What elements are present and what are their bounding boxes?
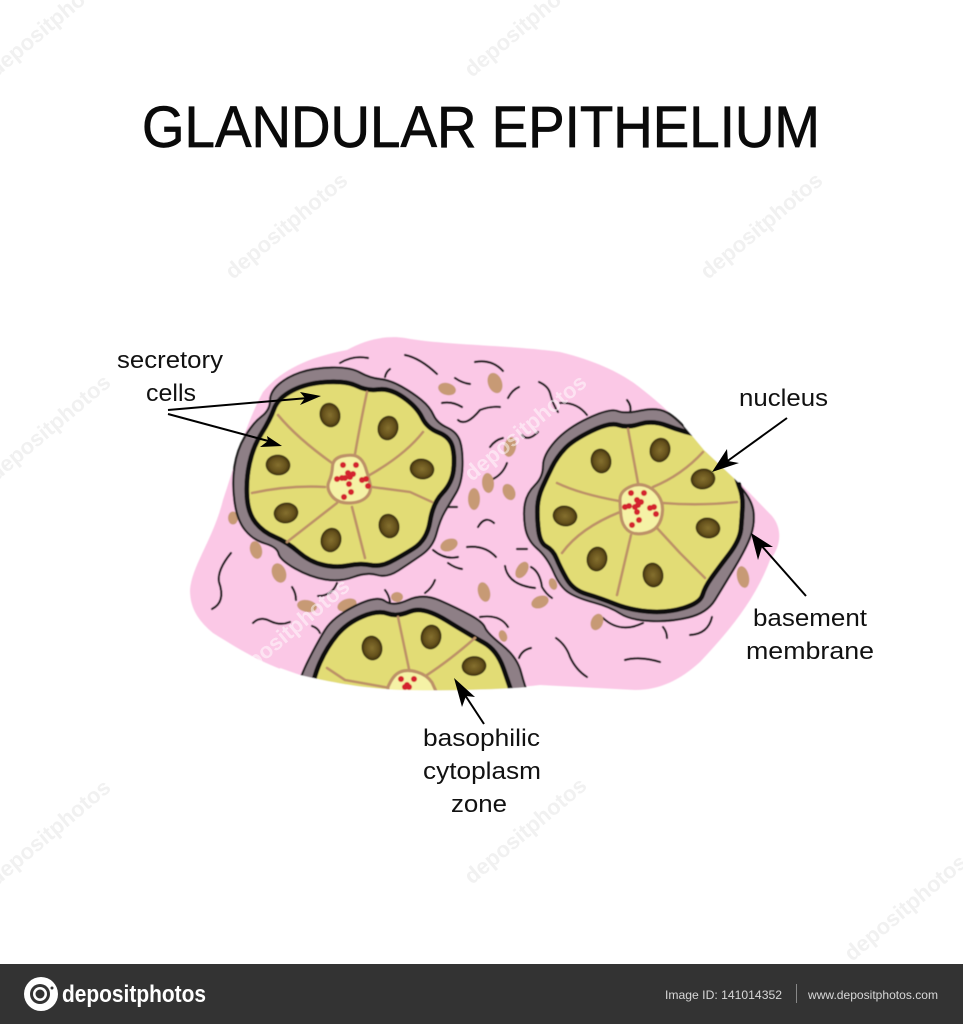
nuclei: [265, 401, 436, 554]
arrow: basement membrane: [751, 533, 806, 596]
label: secretory cells: [117, 347, 223, 407]
text: depositphotos: [459, 369, 591, 486]
cytoplasm zone: [247, 382, 454, 567]
logo wordmark: depositphotos: [62, 981, 206, 1008]
label: basophilic cytoplasm zone: [423, 725, 541, 818]
secretory granules: [334, 462, 371, 500]
text: depositphotos: [695, 573, 827, 690]
nuclei: [360, 623, 487, 677]
cell borders: [252, 392, 432, 558]
pink connective tissue: [190, 337, 779, 690]
arrow: nucleus: [712, 418, 787, 472]
label: secretory cells: secretory: [117, 347, 223, 374]
arrow: secretory cells lower: [168, 414, 282, 447]
title: GLANDULAR EPITHELIUM: [142, 95, 820, 160]
label: secretory cells: cells: [146, 380, 196, 407]
white cut-off along tissue edge: right: [680, 385, 790, 482]
label: nucleus: nucleus: [739, 385, 828, 412]
gland acinus: bottom: [295, 597, 530, 700]
footer bar: [0, 964, 963, 1024]
gland acinus: right: [524, 409, 754, 621]
image id: Image ID: 141014352: [665, 988, 782, 1002]
cytoplasm zone: [537, 422, 743, 612]
secretory granules: [622, 490, 659, 528]
label: basophilic cytoplasm zone: cytoplasm: [423, 758, 541, 785]
basement membrane ring: [295, 597, 530, 700]
lumen: [387, 670, 440, 700]
arrow: basophilic cytoplasm zone: [454, 678, 484, 724]
text: depositphotos: [222, 573, 354, 690]
label: basement membrane: [746, 605, 874, 665]
gland acinus: upper left: [233, 367, 463, 580]
tan fibroblast cells: [228, 371, 751, 643]
secretory granules: [398, 676, 417, 690]
text: depositphotos: [695, 167, 827, 284]
arrow: secretory cells upper: [168, 392, 321, 410]
lumen: [328, 455, 370, 503]
label: basement membrane: basement: [753, 605, 867, 632]
text: depositphotos: [220, 167, 352, 284]
cytoplasm zone: [310, 610, 514, 700]
site url: www.depositphotos.com: [807, 988, 938, 1002]
cell borders: [327, 617, 475, 688]
nuclei: [551, 436, 722, 589]
cell borders: [557, 429, 737, 595]
lumen: [620, 485, 663, 534]
connective tissue fibres: [212, 355, 712, 677]
label: basophilic cytoplasm zone: basophilic: [423, 725, 540, 752]
label: basophilic cytoplasm zone: zone: [451, 791, 507, 818]
logo icon: camera: [24, 977, 58, 1011]
text: depositphotos: [459, 772, 591, 889]
basement membrane ring: [233, 367, 463, 580]
basement membrane ring: [524, 409, 754, 621]
white cut-off along tissue edge: bottom: [280, 668, 640, 720]
label: basement membrane: membrane: [746, 638, 874, 665]
diagram: gland cross-section tissue: [190, 337, 790, 720]
